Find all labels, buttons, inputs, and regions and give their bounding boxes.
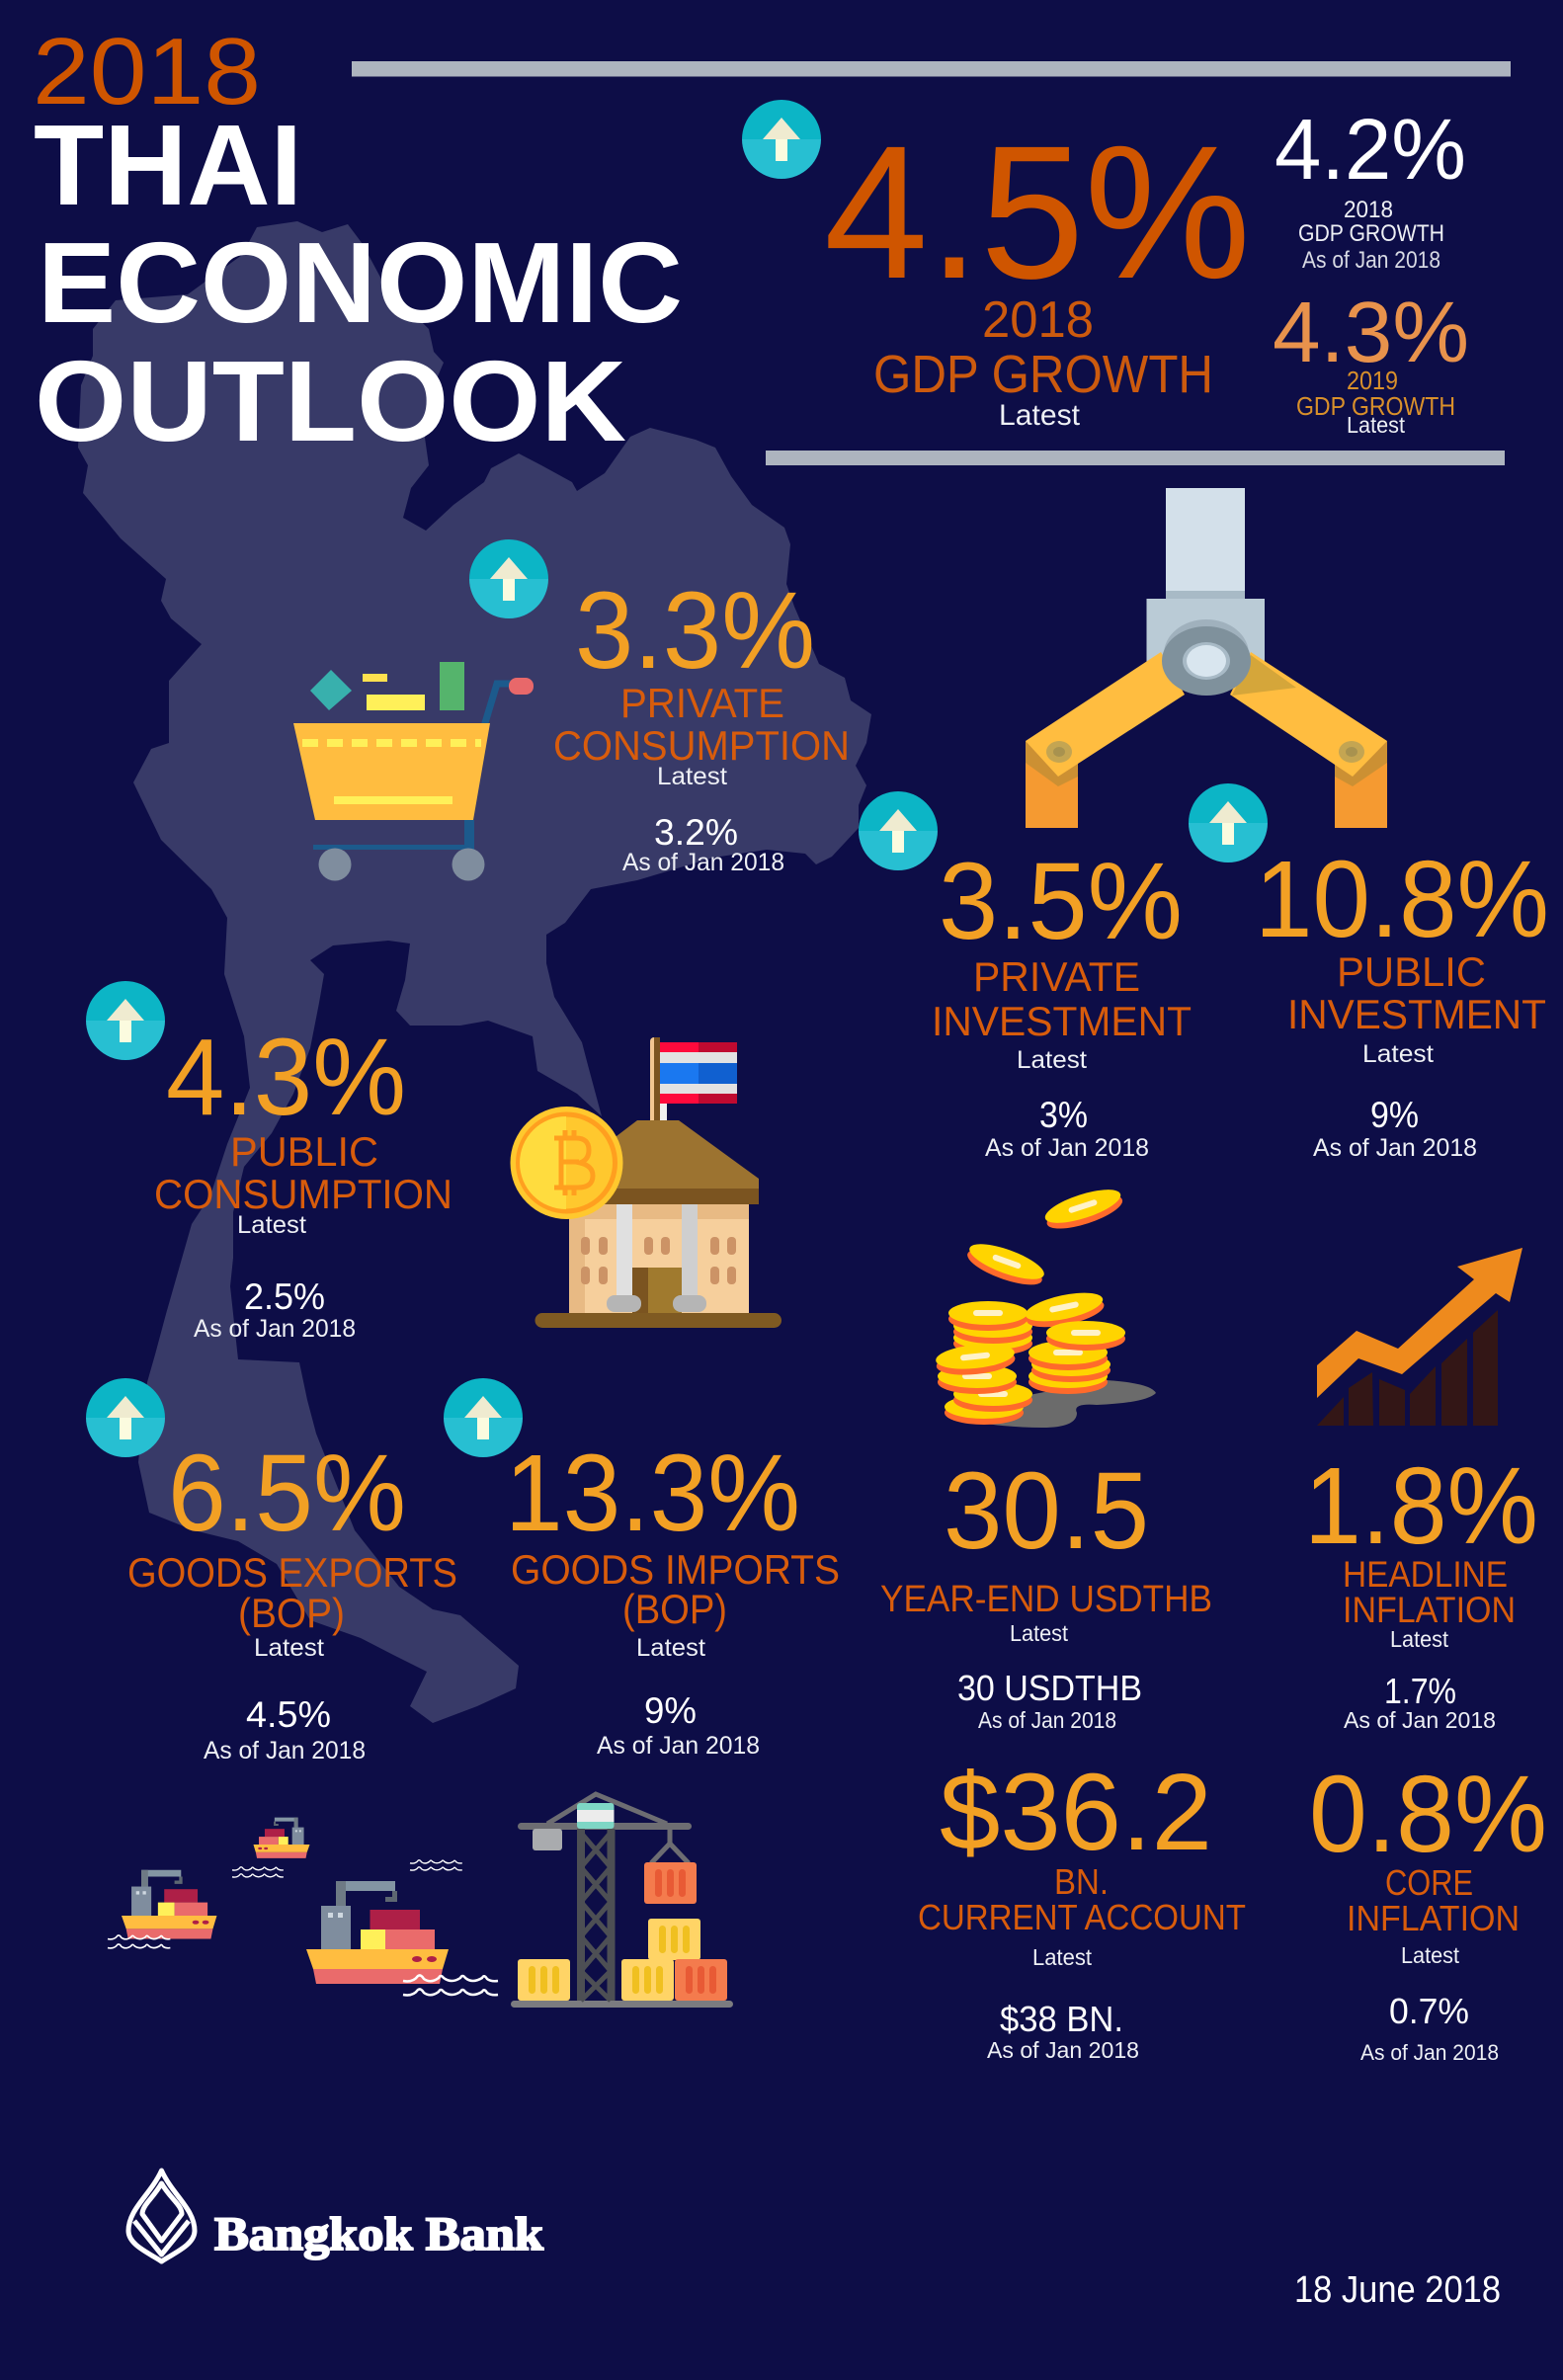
previous date: As of Jan 2018 [987, 2037, 1139, 2063]
latest caption: Latest [1017, 1046, 1087, 1074]
value: $36.2 [940, 1752, 1212, 1873]
previous date: As of Jan 2018 [1313, 1134, 1477, 1162]
panel: year-end USDTHB [880, 1450, 1212, 1733]
previous value: 1.7% [1384, 1671, 1456, 1711]
latest caption: Latest [1010, 1620, 1069, 1646]
icon: up arrow badge [469, 539, 548, 618]
previous value: 3% [1039, 1095, 1088, 1135]
value: 13.3% [505, 1433, 800, 1554]
icon: government building with flag and coin [510, 1037, 782, 1328]
icon: container ships [108, 1818, 498, 1995]
previous date: As of Jan 2018 [978, 1707, 1116, 1733]
label line 2: INVESTMENT [932, 998, 1192, 1044]
previous value: $38 BN. [1000, 1999, 1123, 2039]
GDP latest caption: Latest [999, 399, 1081, 432]
label line 1: GOODS IMPORTS [511, 1546, 840, 1593]
previous date: As of Jan 2018 [194, 1315, 356, 1343]
map of Thailand silhouette [78, 221, 871, 1723]
icon: up arrow badge [444, 1378, 523, 1457]
panel: public investment [1189, 783, 1549, 1162]
panel: GDP growth [742, 100, 1469, 438]
latest caption: Latest [636, 1634, 705, 1662]
logo: Bangkok Bank [128, 2171, 543, 2261]
icon: shopping cart [293, 662, 534, 881]
icon: pile of coins [935, 1183, 1156, 1428]
value: 3.5% [939, 841, 1183, 962]
2019 forecast value: 4.3% [1273, 285, 1469, 380]
latest caption: Latest [237, 1211, 306, 1239]
title line: OUTLOOK: OUTLOOK [35, 337, 626, 465]
icon: rising arrow chart [1317, 1248, 1522, 1426]
panel: goods exports [86, 1378, 457, 1764]
previous value: 0.7% [1389, 1991, 1469, 2031]
icon: up arrow badge [86, 981, 165, 1060]
title line: THAI: THAI [34, 101, 302, 229]
previous date: As of Jan 2018 [622, 849, 784, 876]
label line 1: HEADLINE [1343, 1554, 1508, 1595]
previous value: 9% [1370, 1095, 1419, 1135]
title line: ECONOMIC: ECONOMIC [38, 218, 683, 347]
value: 4.3% [166, 1017, 406, 1138]
latest caption: Latest [254, 1634, 324, 1662]
latest caption: Latest [1390, 1626, 1449, 1652]
previous date: As of Jan 2018 [1344, 1707, 1496, 1733]
icon: robotic claw [1026, 488, 1387, 828]
icon: up arrow badge [859, 791, 938, 870]
label line 2: CONSUMPTION [553, 722, 850, 769]
panel: current account [918, 1752, 1246, 2063]
GDP label: GDP GROWTH [873, 345, 1213, 404]
previous date: As of Jan 2018 [985, 1134, 1149, 1162]
previous 2018 forecast value: 4.2% [1275, 102, 1466, 198]
label: YEAR-END USDTHB [880, 1579, 1212, 1620]
latest caption: Latest [1032, 1944, 1093, 1970]
latest caption: Latest [657, 763, 727, 790]
previous value: 9% [644, 1690, 697, 1731]
previous forecast year: 2018 [1344, 197, 1393, 223]
label line 2: CONSUMPTION [154, 1171, 452, 1217]
value: 30.5 [944, 1450, 1149, 1572]
unit: BN. [1054, 1861, 1109, 1902]
label line 1: PUBLIC [1337, 948, 1486, 995]
2019 year: 2019 [1347, 366, 1398, 395]
label line 1: PRIVATE [973, 953, 1140, 1000]
label line 1: GOODS EXPORTS [127, 1549, 457, 1596]
GDP value: 4.5% [824, 106, 1251, 318]
label line 1: PRIVATE [620, 680, 784, 726]
previous forecast label: GDP GROWTH [1298, 220, 1444, 247]
wordmark: Bangkok Bank [214, 2208, 543, 2260]
previous date: As of Jan 2018 [597, 1732, 760, 1760]
label line 1: CORE [1385, 1862, 1473, 1903]
previous forecast date: As of Jan 2018 [1302, 247, 1440, 274]
icon: leaf emblem [128, 2171, 195, 2261]
panel: headline inflation [1304, 1445, 1538, 1733]
value: 1.8% [1304, 1445, 1538, 1567]
title year: 2018 [33, 19, 261, 124]
latest caption: Latest [1362, 1040, 1434, 1068]
label line 2: INFLATION [1347, 1898, 1520, 1938]
panel: private investment [859, 791, 1192, 1162]
previous value: 4.5% [246, 1694, 331, 1735]
icon: up arrow badge [86, 1378, 165, 1457]
previous value: 2.5% [244, 1276, 325, 1317]
latest caption: Latest [1401, 1942, 1460, 1968]
top divider bar [352, 61, 1511, 77]
icon: up arrow badge [1189, 783, 1268, 862]
panel: core inflation [1309, 1754, 1547, 2065]
panel: goods imports [444, 1378, 840, 1760]
value: 3.3% [575, 570, 815, 692]
icon: up arrow badge [742, 100, 821, 179]
panel: public consumption [86, 981, 452, 1343]
lower divider bar [766, 451, 1505, 465]
previous value: 3.2% [654, 812, 738, 853]
previous date: As of Jan 2018 [1360, 2040, 1499, 2065]
value: 0.8% [1309, 1754, 1547, 1875]
label: CURRENT ACCOUNT [918, 1897, 1246, 1937]
2019 latest caption: Latest [1347, 412, 1406, 438]
value: 6.5% [168, 1433, 406, 1554]
label line 2: (BOP) [238, 1590, 345, 1636]
icon: port crane and containers [511, 1794, 733, 2008]
label line 2: (BOP) [622, 1586, 727, 1632]
previous date: As of Jan 2018 [204, 1737, 366, 1764]
previous value: 30 USDTHB [957, 1668, 1142, 1708]
panel: private consumption [293, 539, 850, 881]
value: 10.8% [1255, 839, 1549, 960]
title [33, 19, 683, 465]
label line 1: PUBLIC [230, 1128, 378, 1175]
label line 2: INFLATION [1343, 1590, 1516, 1630]
2019 label: GDP GROWTH [1296, 391, 1455, 421]
label line 2: INVESTMENT [1287, 991, 1546, 1037]
GDP label year: 2018 [982, 291, 1094, 349]
date: 18 June 2018 [1294, 2269, 1501, 2311]
